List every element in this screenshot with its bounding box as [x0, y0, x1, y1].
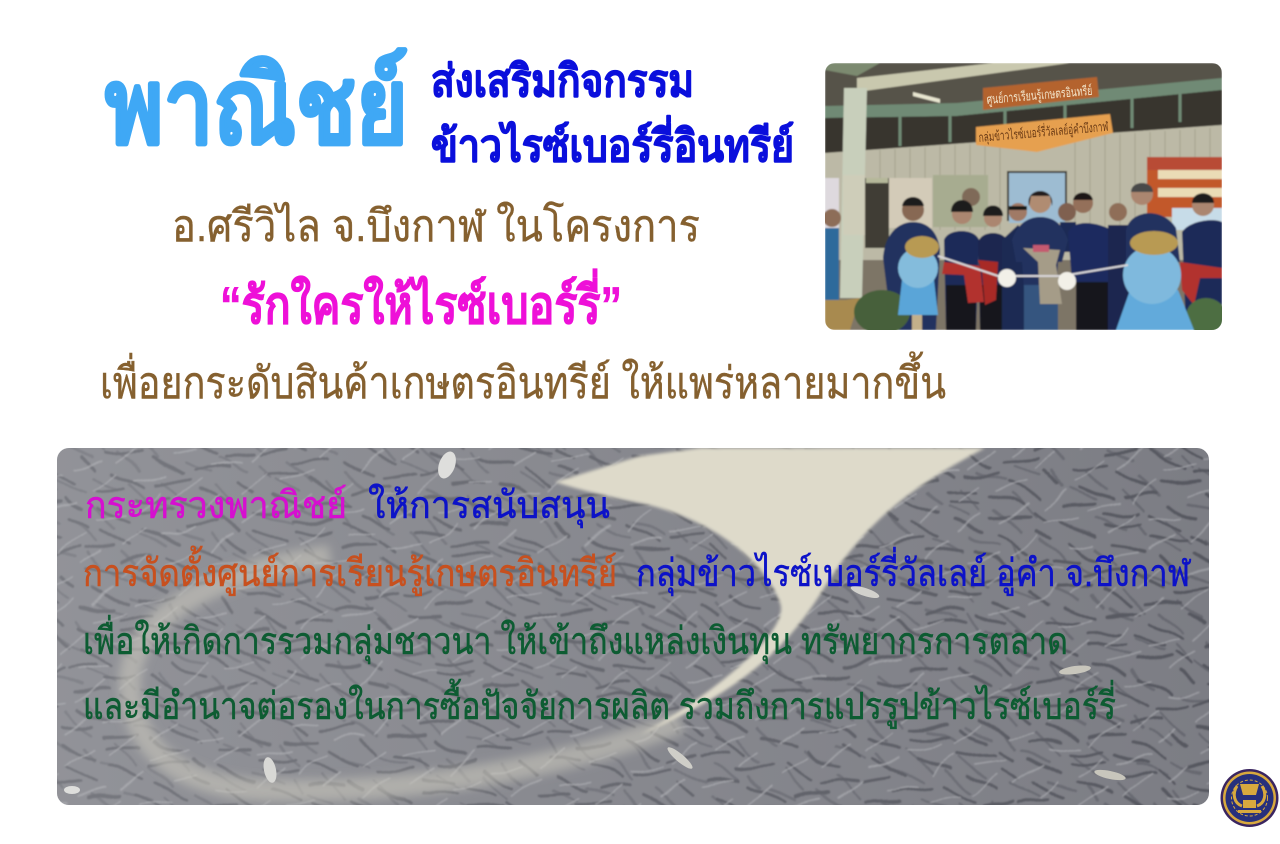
ribbon [938, 256, 1128, 276]
pale grains [438, 452, 456, 478]
spoon rim, left and bottom [130, 556, 680, 791]
people [825, 228, 839, 300]
sign text: กลุ่มข้าวไรซ์เบอร์รี่วัลเลย์อู่คำบึงกาฬ [978, 118, 1110, 146]
dark windows [825, 90, 1222, 153]
heading: organic riceberry: ข้าวไรซ์เบอร์รี่อินทรีย์ [431, 115, 794, 171]
post [840, 88, 867, 298]
rice grains [57, 448, 1209, 805]
line 1 [85, 484, 610, 528]
roof [825, 63, 1222, 106]
line 2: กลุ่มข้าวไรซ์เบอร์รี่วัลเลย์ อู่คำ จ.บึงกาฬ [636, 547, 1192, 596]
icon: ministry seal [1220, 769, 1278, 827]
line 1: กระทรวงพาณิชย์ [85, 484, 347, 527]
green beams [825, 78, 1222, 118]
fluorescent lamp [913, 92, 940, 103]
ribbon rosettes [898, 280, 938, 315]
goal line: เพื่อยกระดับสินค้าเกษตรอินทรีย์ ให้แพร่หลายมากขึ้น [100, 351, 946, 408]
wooden spoon bowl and handle [555, 448, 985, 735]
photo: ribbon-cutting group at the learning centre [823, 63, 1226, 334]
poster [1146, 169, 1222, 218]
line 3: เพื่อให้เกิดการรวมกลุ่มชาวนา ให้เข้าถึงแหล่งเงินทุน ทรัพยากรการตลาด [83, 615, 1068, 664]
heading: promoting activities: ส่งเสริมกิจกรรม [431, 57, 694, 106]
red sashes [942, 262, 984, 303]
subheading: location and project: อ.ศรีวิไล จ.บึงกาฬ ในโครงการ [172, 201, 700, 251]
title: พาณิชย์: พาณิชย์ [105, 48, 408, 166]
panel: black rice background with support details [57, 448, 1209, 805]
line 1: ให้การสนับสนุน [368, 484, 610, 528]
line 2 [83, 545, 1192, 596]
line 2: การจัดตั้งศูนย์การเรียนรู้เกษตรอินทรีย์ [83, 545, 617, 596]
floor foliage and rice sheaves [825, 300, 845, 330]
sign text: ศูนย์การเรียนรู้เกษตรอินทรีย์ [986, 83, 1093, 108]
lighter haze over the left [57, 448, 939, 805]
pale beam [857, 63, 1070, 92]
wall [825, 125, 1222, 260]
project name quote: “รักใครให้ไรซ์เบอร์รี่” [220, 269, 622, 335]
wooden signs [983, 77, 1099, 110]
line 4: และมีอำนาจต่อรองในการซื้อปัจจัยการผลิต รวมถึงการแปรรูปข้าวไรซ์เบอร์รี่ [83, 678, 1116, 729]
